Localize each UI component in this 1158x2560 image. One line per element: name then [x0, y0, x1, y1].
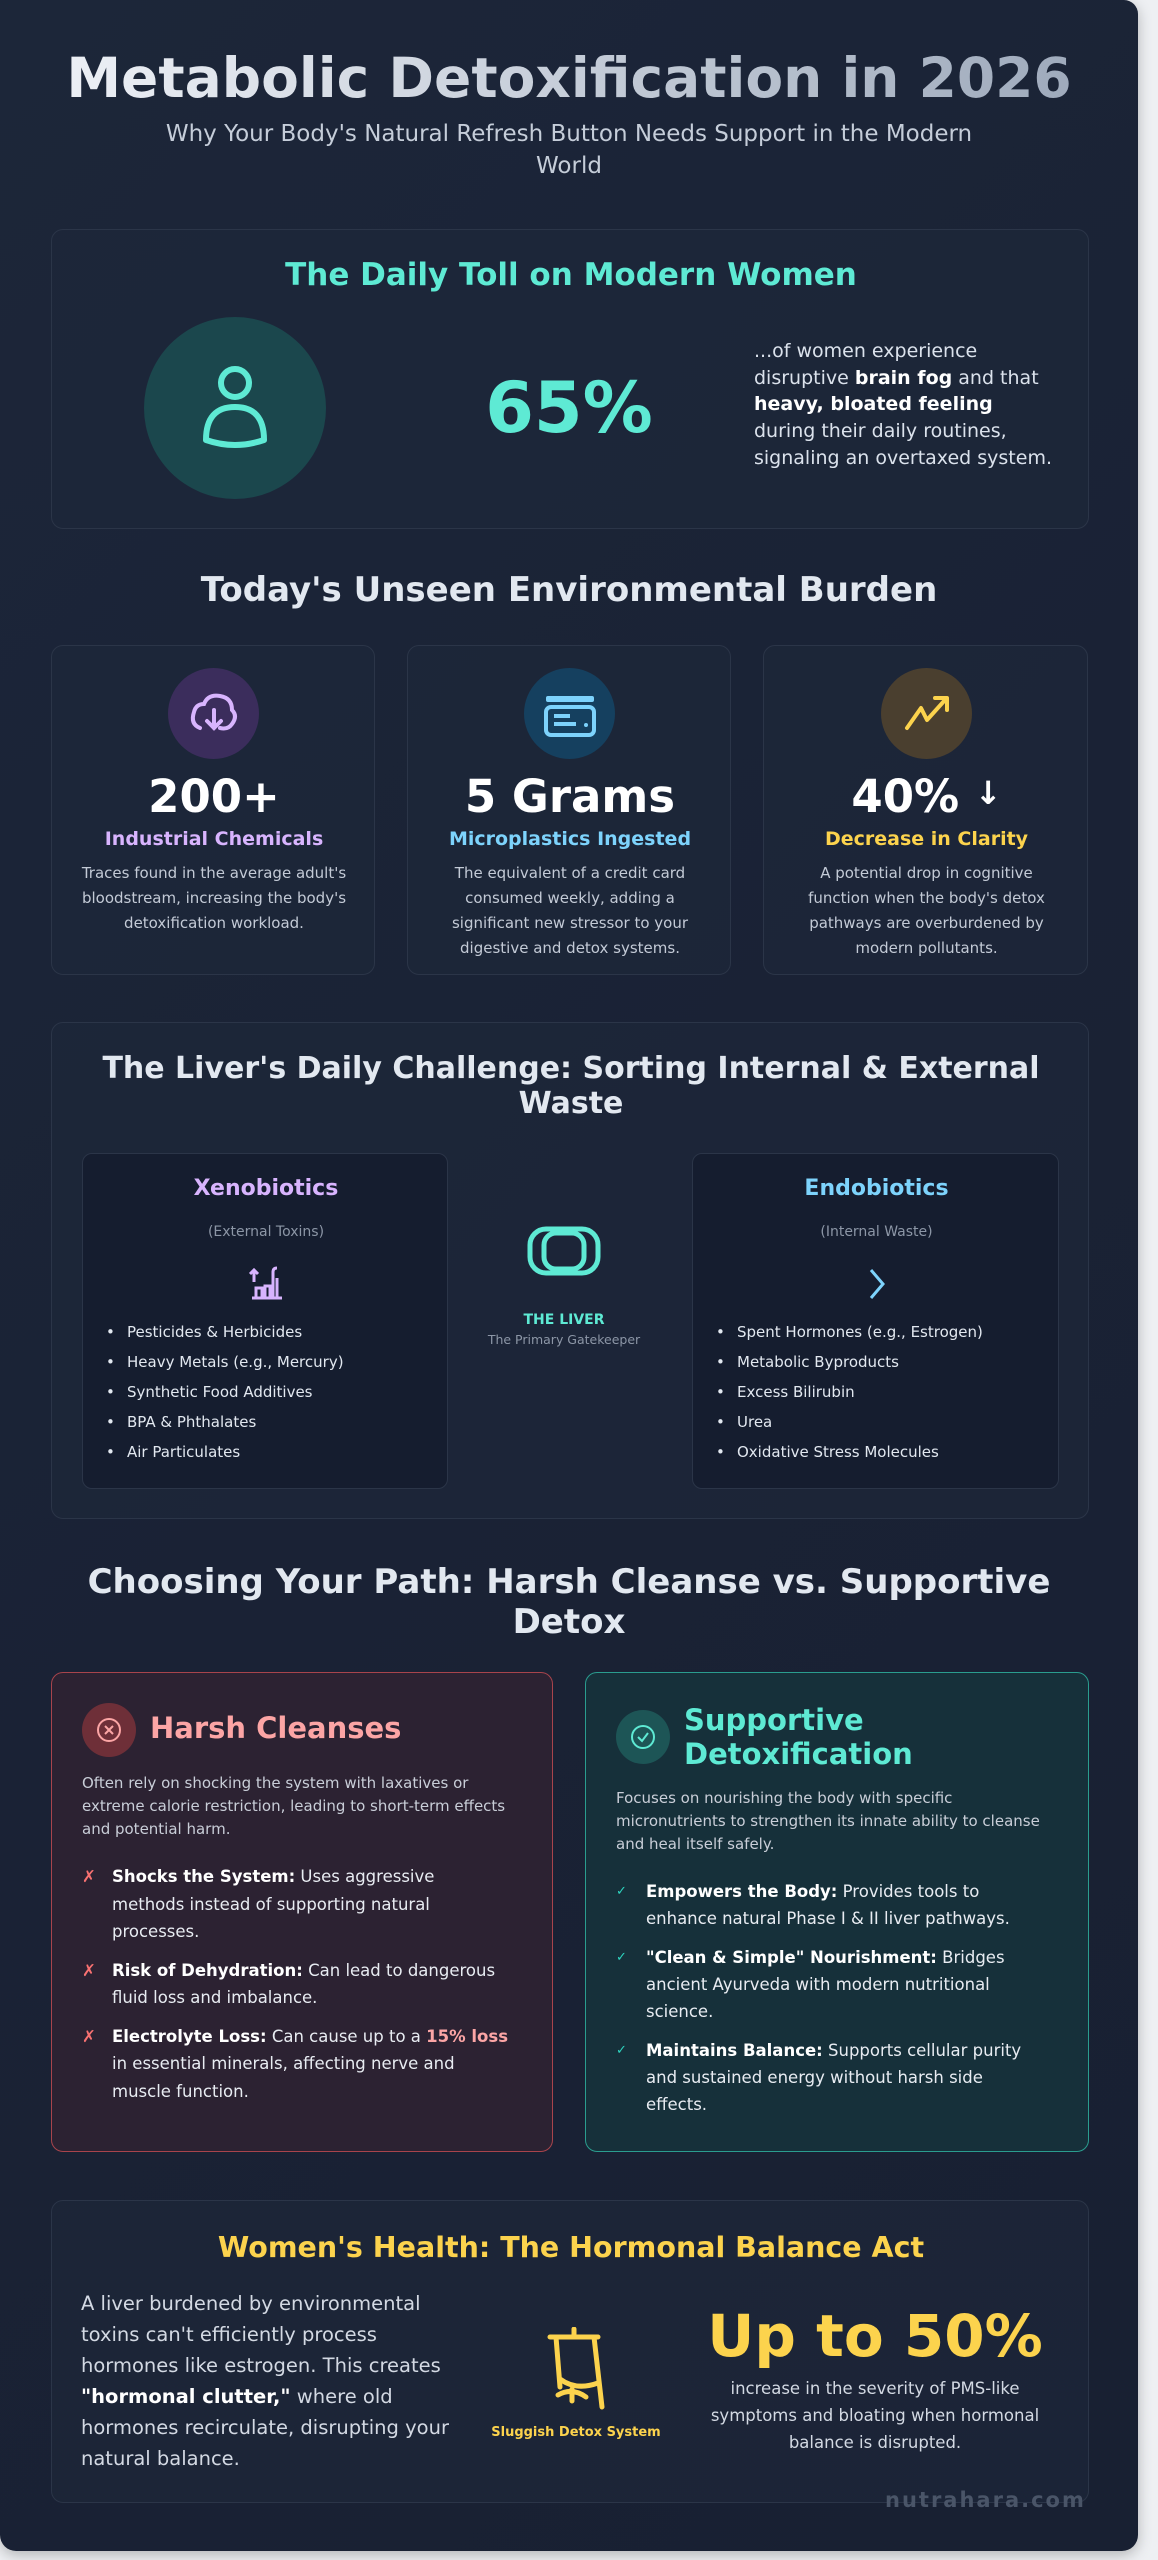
list: Synthetic Food Additives	[127, 1383, 313, 1401]
list: ✓	[616, 2043, 627, 2058]
icon: credit card	[524, 668, 615, 759]
label: Microplastics Ingested	[449, 828, 691, 850]
list: ✓	[616, 1950, 627, 1965]
list	[82, 1867, 508, 2100]
heading: The Liver's Daily Challenge: Sorting Internal & External Waste	[102, 1051, 1040, 1121]
panel: hormonal balance	[51, 2200, 1089, 2503]
list: Metabolic Byproducts	[737, 1353, 899, 1371]
icon: check circle	[616, 1710, 670, 1764]
list: Maintains Balance: Supports cellular purity and sustained energy without harsh side effects.	[646, 2041, 1021, 2114]
label: THE LIVER	[523, 1312, 604, 1328]
list	[108, 1323, 344, 1461]
title: Harsh Cleanses	[150, 1711, 401, 1745]
title: Endobiotics	[804, 1176, 949, 1201]
icon: trend	[881, 668, 972, 759]
icon: liver	[488, 1226, 640, 1347]
panel: liver challenge	[51, 1022, 1089, 1519]
panel: microplastics	[407, 645, 731, 975]
text block: A liver burdened by environmental toxins can't efficiently process hormones like estrogen. This creates "hormonal clutter," where old hormones recirculate, disrupting your natural balance.	[81, 2292, 449, 2470]
title: Metabolic Detoxification in 2026	[66, 46, 1072, 110]
title: Supportive Detoxification	[684, 1703, 913, 1771]
list: Excess Bilirubin	[737, 1383, 855, 1401]
icon: person	[144, 317, 326, 499]
list: Urea	[737, 1413, 772, 1431]
list	[718, 1323, 983, 1461]
panel: xenobiotics	[82, 1153, 448, 1489]
panel: chemicals	[51, 645, 375, 975]
subtitle: (Internal Waste)	[820, 1224, 933, 1240]
heading: burden: Today's Unseen Environmental Burden	[201, 570, 937, 610]
sublabel: The Primary Gatekeeper	[488, 1332, 640, 1347]
icon: cloud	[168, 668, 259, 759]
label: Sluggish Detox System	[491, 2425, 661, 2440]
stat: 5 Grams	[465, 770, 675, 823]
list: Heavy Metals (e.g., Mercury)	[127, 1353, 344, 1371]
icon: x circle	[82, 1703, 136, 1757]
panel: daily toll	[51, 229, 1089, 529]
subtitle: Why Your Body's Natural Refresh Button Needs Support in the Modern World	[166, 121, 972, 179]
list: Oxidative Stress Molecules	[737, 1443, 939, 1461]
list: ✗	[82, 2026, 96, 2046]
list: Air Particulates	[127, 1443, 240, 1461]
watermark: nutrahara.com	[885, 2488, 1086, 2512]
desc: A potential drop in cognitive function when the body's detox pathways are overburdened by modern pollutants.	[808, 864, 1045, 957]
list: ✗	[82, 1867, 96, 1886]
subtitle: (External Toxins)	[208, 1224, 324, 1240]
heading: path: Choosing Your Path: Harsh Cleanse vs. Supportive Detox	[88, 1562, 1050, 1642]
panel: endobiotics	[692, 1153, 1059, 1489]
list: Electrolyte Loss: Can cause up to a 15% loss in essential minerals, affecting nerve and muscle function.	[112, 2026, 508, 2100]
title: Xenobiotics	[194, 1176, 338, 1201]
icon: sluggish detox	[491, 2327, 661, 2440]
list	[616, 1882, 1021, 2114]
desc: increase in the severity of PMS-like symptoms and bloating when hormonal balance is disrupted.	[711, 2379, 1039, 2452]
list: Pesticides & Herbicides	[127, 1323, 302, 1341]
list: Empowers the Body: Provides tools to enhance natural Phase I & II liver pathways.	[646, 1882, 1010, 1928]
desc: Traces found in the average adult's bloodstream, increasing the body's detoxification workload.	[82, 864, 346, 932]
heading: The Daily Toll on Modern Women	[285, 257, 857, 293]
list: "Clean & Simple" Nourishment: Bridges ancient Ayurveda with modern nutritional science.	[646, 1948, 1005, 2021]
panel: harsh cleanses	[51, 1672, 553, 2152]
panel: clarity	[763, 645, 1088, 975]
stat: Up to 50%	[707, 2302, 1043, 2370]
label: Decrease in Clarity	[825, 828, 1028, 850]
icon: chevron	[870, 1269, 885, 1299]
list: ✗	[82, 1960, 96, 1980]
heading: Women's Health: The Hormonal Balance Act	[218, 2231, 924, 2264]
list: Risk of Dehydration: Can lead to dangerous fluid loss and imbalance.	[112, 1960, 495, 2007]
list: Spent Hormones (e.g., Estrogen)	[737, 1323, 983, 1341]
text block: ...of women experience disruptive brain fog and that heavy, bloated feeling during their daily routines, signaling an overtaxed system.	[754, 340, 1052, 469]
stat: 40% ↓	[851, 770, 1002, 823]
desc: The equivalent of a credit card consumed weekly, adding a significant new stressor to your digestive and detox systems.	[452, 864, 688, 957]
list: BPA & Phthalates	[127, 1413, 256, 1431]
stat: 200+	[148, 770, 280, 823]
stat 65%: 65%	[485, 367, 653, 449]
panel: supportive detox	[585, 1672, 1089, 2152]
icon: factory	[249, 1266, 282, 1300]
list: ✓	[616, 1884, 627, 1899]
desc: Focuses on nourishing the body with specific micronutrients to strengthen its innate ability to cleanse and heal itself safely.	[616, 1789, 1040, 1853]
list: Shocks the System: Uses aggressive methods instead of supporting natural processes.	[112, 1867, 434, 1941]
label: Industrial Chemicals	[105, 828, 323, 850]
desc: Often rely on shocking the system with laxatives or extreme calorie restriction, leading to short-term effects and potential harm.	[82, 1774, 505, 1838]
